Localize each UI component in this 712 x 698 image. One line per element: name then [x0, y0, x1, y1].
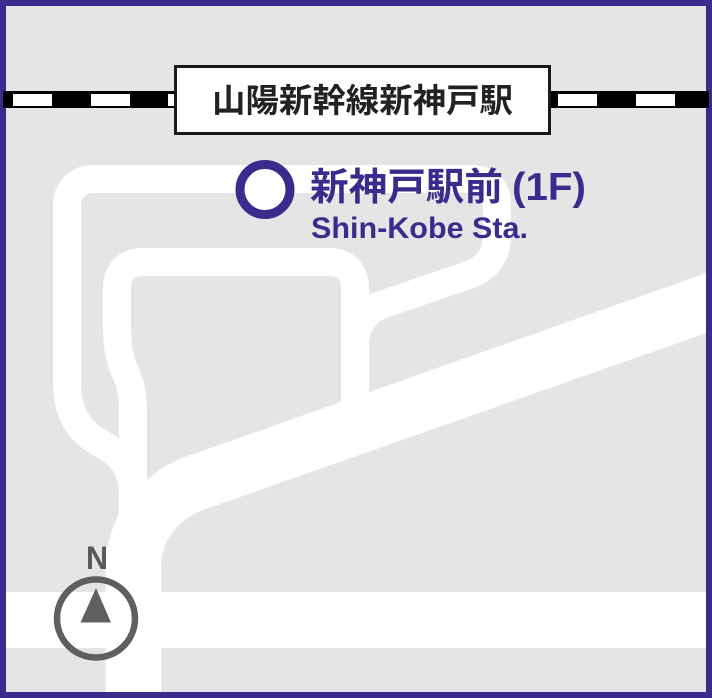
bus stop name english: Shin-Kobe Sta. — [311, 212, 528, 245]
north compass — [57, 540, 135, 658]
station name: 山陽新幹線新神戸駅 — [212, 82, 513, 119]
bus stop name japanese: 新神戸駅前 — [310, 167, 503, 209]
trunk and diagonal road — [106, 271, 712, 698]
bus stop marker — [240, 164, 290, 214]
railway line — [3, 91, 709, 108]
station name box — [176, 66, 550, 134]
compass letter N: N — [86, 540, 108, 576]
road network — [0, 179, 712, 698]
horizontal road — [0, 592, 712, 648]
bus stop name japanese: (1F) — [512, 166, 586, 209]
road junction fillet — [365, 318, 388, 345]
outer loop road — [67, 179, 497, 495]
inner loop road — [117, 262, 355, 500]
